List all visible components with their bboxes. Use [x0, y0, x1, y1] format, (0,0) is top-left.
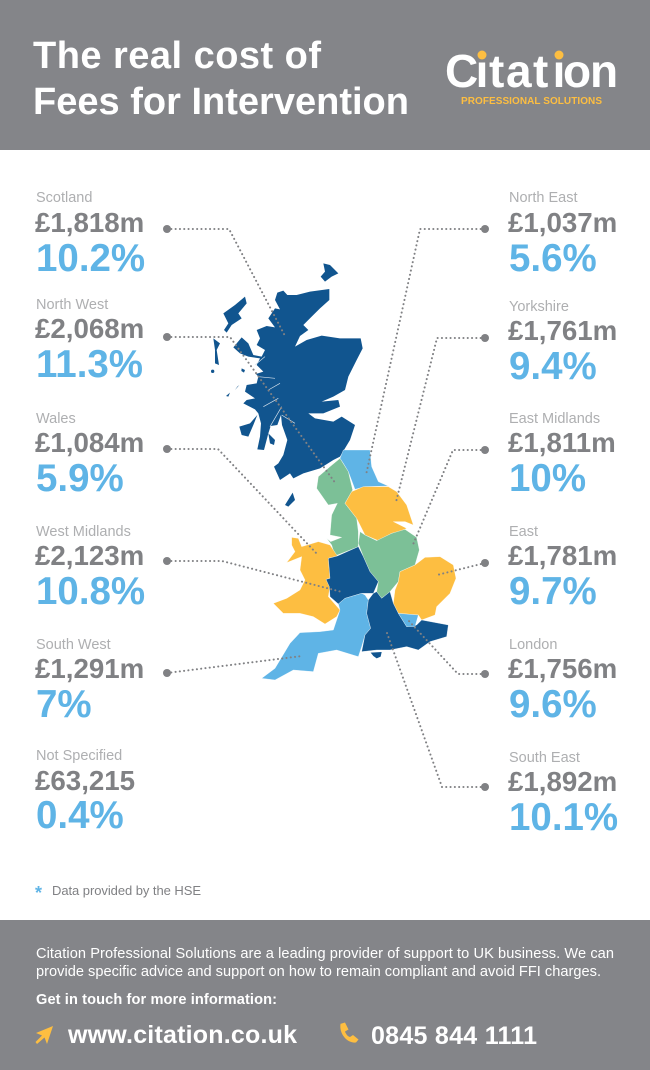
stat: East Midlands: £1,811m: [508, 427, 616, 458]
stat: Wales: £1,084m: [35, 427, 144, 458]
stat: South West: South West: [36, 637, 111, 653]
stat: North West: £2,068m: [35, 313, 144, 344]
region: East: [393, 557, 456, 620]
stat: North East: £1,037m: [508, 207, 617, 238]
region: Wales: [273, 537, 340, 624]
stat: Yorkshire: 9.4%: [509, 345, 597, 388]
stat: North West: [35, 297, 144, 386]
logo: Citation: PROFESSIONAL SOLUTIONS: [461, 96, 602, 107]
title: The real cost of: [33, 35, 321, 77]
stat: Wales: [35, 411, 144, 500]
region: North West: [317, 458, 358, 556]
stat: Wales: 5.9%: [36, 457, 124, 500]
stat: South East: 10.1%: [509, 796, 618, 839]
stat: West Midlands: 10.8%: [36, 570, 145, 613]
region: South West: [262, 593, 371, 680]
stat: Scotland: £1,818m: [35, 207, 144, 238]
stat: West Midlands: £2,123m: [35, 540, 144, 571]
stat: Yorkshire: Yorkshire: [509, 299, 569, 315]
region: London: [398, 613, 418, 627]
stat: North West: 11.3%: [36, 343, 143, 386]
icon: arrow: [36, 1026, 53, 1044]
stat: Not Specified: Not Specified: [36, 748, 122, 764]
stat: Scotland: Scotland: [36, 190, 92, 206]
stat: Yorkshire: £1,761m: [508, 315, 617, 346]
data source note: [35, 883, 201, 903]
data source note: *: [35, 883, 42, 903]
stat: Not Specified: £63,215: [35, 765, 135, 796]
stat: South East: South East: [509, 750, 580, 766]
region: Scotland: [211, 263, 363, 480]
stat: South East: [508, 750, 618, 839]
stat: London: [508, 637, 617, 726]
stat: West Midlands: West Midlands: [36, 524, 131, 540]
stat: South West: [35, 637, 144, 726]
stat: East Midlands: East Midlands: [509, 411, 600, 427]
stat: East: £1,781m: [508, 540, 617, 571]
call to action: Get in touch for more information:: [36, 992, 277, 1008]
leader lines: [163, 225, 489, 791]
footer description: provide specific advice and support on how to remain compliant and avoid FFI charges.: [36, 964, 601, 980]
stat: London: 9.6%: [509, 683, 597, 726]
region: South East: [362, 592, 448, 652]
data source note: Data provided by the HSE: [52, 883, 201, 898]
website: www.citation.co.uk: [67, 1021, 297, 1049]
stat: East: [508, 524, 617, 613]
stat: South West: £1,291m: [35, 653, 144, 684]
stat: North West: North West: [36, 297, 108, 313]
icon: phone: [340, 1022, 358, 1043]
region: West Midlands: [326, 547, 378, 604]
footer description: Citation Professional Solutions are a leading provider of support to UK business. We can: [36, 946, 614, 962]
stat: East: 9.7%: [509, 570, 597, 613]
stat: South East: £1,892m: [508, 766, 617, 797]
Isle of Man: [285, 493, 295, 507]
title: Fees for Intervention: [33, 81, 409, 123]
stat: West Midlands: [35, 524, 145, 613]
stat: East: East: [509, 524, 538, 540]
stat: East Midlands: 10%: [509, 457, 586, 500]
logo: Citation: Citation: [445, 45, 618, 97]
region: North East: [340, 450, 388, 489]
title: [33, 35, 409, 123]
stat: Scotland: [35, 190, 145, 280]
region: East Midlands: [358, 529, 419, 598]
stat: North East: [508, 190, 617, 280]
stat: South West: 7%: [36, 683, 92, 726]
stat: Scotland: 10.2%: [36, 237, 145, 280]
footer description: [36, 946, 614, 980]
stat: North East: 5.6%: [509, 237, 597, 280]
header band: [0, 0, 650, 150]
UK map: [211, 263, 456, 680]
Isle of Wight: [371, 652, 382, 658]
stat: Not Specified: [35, 748, 135, 837]
stat: Yorkshire: [508, 299, 617, 388]
phone number: 0845 844 1111: [371, 1022, 537, 1050]
stat: North East: North East: [509, 190, 578, 206]
footer band: [0, 920, 650, 1070]
region: Yorkshire: [345, 487, 413, 541]
stat: Not Specified: 0.4%: [36, 794, 124, 837]
stat: London: London: [509, 637, 557, 653]
stat: Wales: Wales: [36, 411, 76, 427]
stat: London: £1,756m: [508, 653, 617, 684]
stat: East Midlands: [508, 411, 616, 500]
